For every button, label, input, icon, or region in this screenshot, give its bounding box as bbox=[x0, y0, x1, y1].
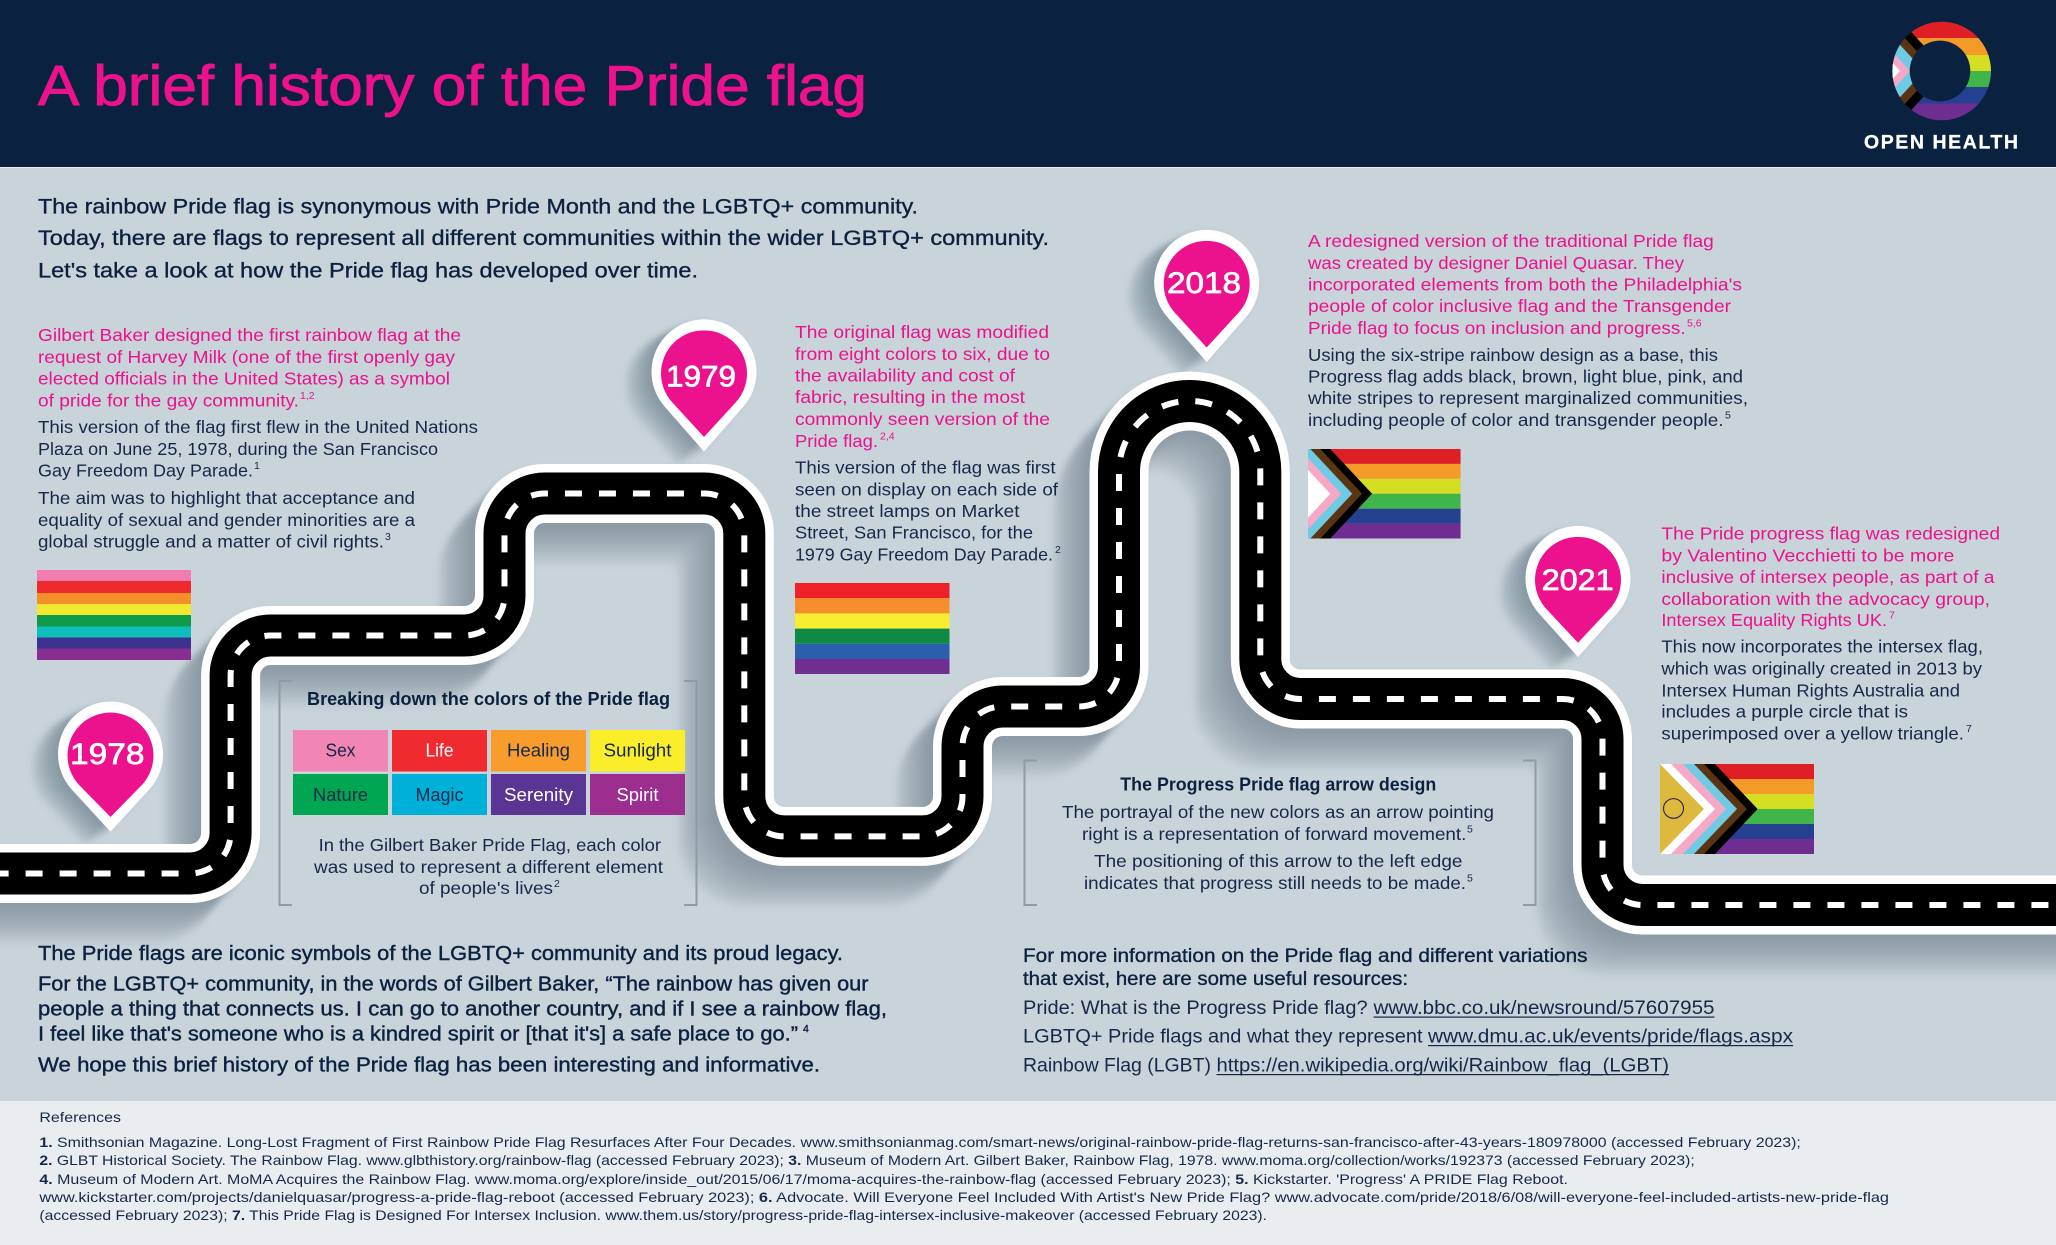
panel caption: was used to represent a different element bbox=[313, 857, 663, 877]
1979 pink text: from eight colors to six, due to bbox=[795, 344, 1050, 364]
2018 pink text: was created by designer Daniel Quasar. They bbox=[1307, 253, 1684, 273]
panel body text: The portrayal of the new colors as an arrow pointing bbox=[1062, 802, 1494, 822]
title: A brief history of the Pride flag bbox=[38, 54, 867, 118]
closing statement: people a thing that connects us. I can go to another country, and if I see a rainbow flag, bbox=[38, 998, 887, 1020]
colour meaning grid bbox=[293, 730, 685, 815]
1978 pink text: 1,2 bbox=[300, 390, 315, 402]
1978 body text: Gay Freedom Day Parade. bbox=[38, 460, 253, 480]
resource link: DMU: LGBTQ+ Pride flags and what they represent bbox=[1023, 1026, 1423, 1048]
pin: 1978: 1978 bbox=[70, 738, 144, 771]
1979 pink text: 2,4 bbox=[880, 430, 895, 442]
1978 body text: 1 bbox=[254, 460, 260, 472]
2018 pink text: 5,6 bbox=[1687, 318, 1702, 330]
2021 body text: which was originally created in 2013 by bbox=[1660, 658, 1982, 678]
1979 body text: Street, San Francisco, for the bbox=[795, 522, 1033, 542]
1979 pink text: fabric, resulting in the most bbox=[795, 387, 1025, 407]
closing statement: 4 bbox=[803, 1023, 809, 1035]
panel body text: 5 bbox=[1467, 872, 1473, 884]
2018 body text: Using the six-stripe rainbow design as a base, this bbox=[1308, 345, 1718, 365]
logo wordmark: OPEN HEALTH bbox=[1864, 131, 2018, 153]
resource link: Wikipedia: https://en.wikipedia.org/wiki/Rainbow_flag_(LGBT) bbox=[1216, 1054, 1669, 1076]
1979 body text: 1979 Gay Freedom Day Parade. bbox=[795, 544, 1053, 564]
2021 body text bbox=[1660, 636, 1983, 744]
2018 pink text: A redesigned version of the traditional Pride flag bbox=[1308, 231, 1714, 251]
1978 body text: This version of the flag first flew in the United Nations bbox=[38, 417, 478, 437]
panel: 1979 text bbox=[795, 322, 1061, 674]
2021 pink text: The Pride progress flag was redesigned bbox=[1661, 524, 2000, 544]
2021 body text: 7 bbox=[1966, 723, 1972, 735]
1978 body text: global struggle and a matter of civil rights. bbox=[38, 532, 384, 552]
panel heading: The Progress Pride flag arrow design bbox=[1120, 774, 1436, 794]
panel body text: 5 bbox=[1467, 824, 1473, 836]
2018 body text: Progress flag adds black, brown, light blue, pink, and bbox=[1308, 366, 1743, 386]
1978 pink text: elected officials in the United States) as a symbol bbox=[38, 368, 450, 388]
1979 pink text bbox=[795, 322, 1050, 451]
references list bbox=[38, 1135, 1889, 1223]
panel: 2021 text bbox=[1610, 524, 2000, 854]
pin shadows bbox=[31, 231, 1628, 845]
panel: 1978 text bbox=[37, 325, 478, 660]
panel caption: In the Gilbert Baker Pride Flag, each color bbox=[319, 835, 661, 855]
2018 pink text: people of color inclusive flag and the Transgender bbox=[1308, 296, 1731, 316]
1978 pink text bbox=[38, 325, 461, 410]
1979 body text: seen on display on each side of bbox=[795, 480, 1058, 500]
panel heading: Breaking down the colors of the Pride flag bbox=[307, 689, 670, 709]
colour meaning grid: Healing bbox=[507, 740, 570, 760]
resource link: Wikipedia bbox=[1023, 1054, 1669, 1076]
references heading: References bbox=[39, 1110, 121, 1125]
colour meaning grid: Life bbox=[426, 740, 454, 760]
panel: breaking down the colors bbox=[280, 681, 696, 905]
1979 pink text: Pride flag. bbox=[795, 431, 878, 451]
pin: 1979 bbox=[652, 319, 756, 452]
flag: six stripe bbox=[795, 583, 950, 674]
panel caption bbox=[313, 835, 663, 898]
1978 body text: equality of sexual and gender minorities are a bbox=[38, 510, 415, 530]
colour meaning grid: Nature bbox=[313, 785, 368, 805]
1979 pink text: The original flag was modified bbox=[795, 322, 1049, 342]
2021 pink text bbox=[1661, 524, 2000, 630]
flag: Intersex-inclusive Progress Pride bbox=[1660, 764, 1814, 854]
1978 body text: 3 bbox=[385, 531, 391, 543]
2021 pink text: Intersex Equality Rights UK. bbox=[1661, 610, 1887, 630]
colour meaning grid: Spirit bbox=[616, 785, 658, 805]
2018 body text: 5 bbox=[1725, 410, 1731, 422]
flag: Gilbert Baker eight stripe bbox=[37, 570, 191, 660]
2021 body text: includes a purple circle that is bbox=[1661, 702, 1908, 722]
2021 pink text: collaboration with the advocacy group, bbox=[1661, 589, 1990, 609]
resource link: BBC: Pride: What is the Progress Pride flag? bbox=[1023, 997, 1368, 1019]
colour meaning grid: Serenity bbox=[504, 785, 573, 805]
pin: 2021 bbox=[1526, 526, 1630, 657]
intro text: Let's take a look at how the Pride flag has developed over time. bbox=[38, 258, 698, 282]
intro text bbox=[38, 194, 1049, 282]
resource link: BBC: www.bbc.co.uk/newsround/57607955 bbox=[1372, 997, 1715, 1019]
resource link: Wikipedia: Rainbow Flag (LGBT) bbox=[1023, 1054, 1211, 1076]
2021 body text: Intersex Human Rights Australia and bbox=[1661, 680, 1960, 700]
references footer bbox=[0, 1101, 2056, 1245]
references list: (accessed February 2023); 7. This Pride Flag is Designed For Intersex Inclusion. www.them.us/story/progress-pride-flag-intersex-inclusive-makeover (accessed February 2023). bbox=[39, 1208, 1267, 1223]
references list: www.kickstarter.com/projects/danielquasar/progress-a-pride-flag-reboot (accessed February 2023); 6. Advocate. Will Everyone Feel Included With Artist's New Pride Flag? www.advocate.com/pride/2018/6/08/will-everyone-feel-included-artists-new-pride-flag bbox=[38, 1190, 1889, 1205]
pin: 1979: 1979 bbox=[666, 361, 736, 394]
panel body text: right is a representation of forward movement. bbox=[1082, 824, 1466, 844]
pin: 2018 bbox=[1154, 230, 1259, 362]
panel caption: 2 bbox=[554, 878, 560, 890]
colour meaning grid: Sunlight bbox=[604, 740, 672, 760]
2018 pink text: incorporated elements from both the Philadelphia's bbox=[1308, 274, 1742, 294]
1978 pink text: request of Harvey Milk (one of the first openly gay bbox=[38, 347, 455, 367]
2021 pink text: by Valentino Vecchietti to be more bbox=[1661, 546, 1954, 566]
2018 body text: including people of color and transgender people. bbox=[1308, 410, 1724, 430]
bracket frame bbox=[1024, 760, 1536, 905]
panel: progress pride arrow design bbox=[1024, 760, 1536, 905]
colour meaning grid: Magic bbox=[416, 785, 464, 805]
2018 body text bbox=[1307, 345, 1748, 430]
pin: 2018: 2018 bbox=[1167, 267, 1241, 300]
1979 body text: This version of the flag was first bbox=[795, 458, 1056, 478]
panel caption: of people's lives bbox=[419, 878, 553, 898]
closing statement bbox=[38, 942, 887, 1076]
bracket frame bbox=[280, 681, 696, 905]
logo: Open Health bbox=[1864, 22, 2017, 149]
closing statement: We hope this brief history of the Pride flag has been interesting and informative. bbox=[38, 1054, 820, 1076]
closing statement: The Pride flags are iconic symbols of the LGBTQ+ community and its proud legacy. bbox=[38, 942, 843, 965]
1979 body text: the street lamps on Market bbox=[795, 501, 1020, 521]
2021 pink text: 7 bbox=[1889, 610, 1895, 622]
2021 body text: This now incorporates the intersex flag, bbox=[1661, 636, 1983, 656]
2018 pink text bbox=[1307, 231, 1742, 338]
closing statement: I feel like that's someone who is a kindred spirit or [that it's] a safe place to go.” bbox=[38, 1022, 798, 1046]
intro text: The rainbow Pride flag is synonymous with Pride Month and the LGBTQ+ community. bbox=[38, 194, 918, 218]
road shadow bbox=[0, 404, 2056, 947]
colour meaning grid: Sex bbox=[326, 740, 356, 760]
flag: Progress Pride bbox=[1308, 449, 1461, 538]
1979 pink text: commonly seen version of the bbox=[795, 409, 1050, 429]
closing statement: For the LGBTQ+ community, in the words of Gilbert Baker, “The rainbow has given our bbox=[38, 972, 869, 996]
header band bbox=[0, 0, 2056, 168]
1978 body text: Plaza on June 25, 1978, during the San Francisco bbox=[38, 439, 438, 459]
2021 body text: superimposed over a yellow triangle. bbox=[1661, 724, 1964, 744]
panel body text bbox=[1062, 802, 1494, 893]
useful resources: For more information on the Pride flag and different variations bbox=[1023, 945, 1588, 967]
references list: 2. GLBT Historical Society. The Rainbow Flag. www.glbthistory.org/rainbow-flag (accessed February 2023); 3. Museum of Modern Art. Gilbert Baker, Rainbow Flag, 1978. www.moma.org/collection/works/192373 (accessed February 2023); bbox=[39, 1153, 1695, 1168]
panel body text: indicates that progress still needs to be made. bbox=[1084, 873, 1466, 893]
useful resources bbox=[1023, 945, 1793, 1076]
pin: 2021: 2021 bbox=[1542, 564, 1614, 597]
panel: 2018 text bbox=[1259, 231, 1748, 538]
1979 pink text: the availability and cost of bbox=[795, 366, 1015, 386]
resource link: BBC bbox=[1023, 997, 1715, 1019]
1978 body text bbox=[38, 417, 478, 552]
panel body text: The positioning of this arrow to the left edge bbox=[1094, 851, 1462, 871]
2018 pink text: Pride flag to focus on inclusion and progress. bbox=[1308, 318, 1686, 338]
1979 body text bbox=[795, 458, 1061, 564]
1978 pink text: of pride for the gay community. bbox=[38, 390, 299, 410]
resource link: DMU: www.dmu.ac.uk/events/pride/flags.aspx bbox=[1427, 1026, 1793, 1048]
2021 pink text: inclusive of intersex people, as part of a bbox=[1661, 567, 1995, 587]
1978 body text: The aim was to highlight that acceptance and bbox=[38, 488, 415, 508]
useful resources: that exist, here are some useful resources: bbox=[1023, 968, 1408, 990]
1979 body text: 2 bbox=[1055, 544, 1061, 556]
references list: 1. Smithsonian Magazine. Long-Lost Fragment of First Rainbow Pride Flag Resurfaces After Four Decades. www.smithsonianmag.com/smart-news/original-rainbow-pride-flag-returns-san-francisco-after-43-years-180978000 (accessed February 2023); bbox=[39, 1135, 1801, 1150]
pin: 1978 bbox=[58, 702, 163, 832]
references list: 4. Museum of Modern Art. MoMA Acquires the Rainbow Flag. www.moma.org/explore/inside_out/2015/06/17/moma-acquires-the-rainbow-flag (accessed February 2023); 5. Kickstarter. 'Progress' A PRIDE Flag Reboot. bbox=[39, 1172, 1568, 1187]
1978 pink text: Gilbert Baker designed the first rainbow flag at the bbox=[38, 325, 461, 345]
2018 body text: white stripes to represent marginalized communities, bbox=[1307, 388, 1748, 408]
intro text: Today, there are flags to represent all different communities within the wider LGBTQ+ community. bbox=[38, 226, 1049, 250]
resource link: DMU bbox=[1023, 1026, 1793, 1048]
winding road timeline bbox=[0, 401, 2056, 905]
